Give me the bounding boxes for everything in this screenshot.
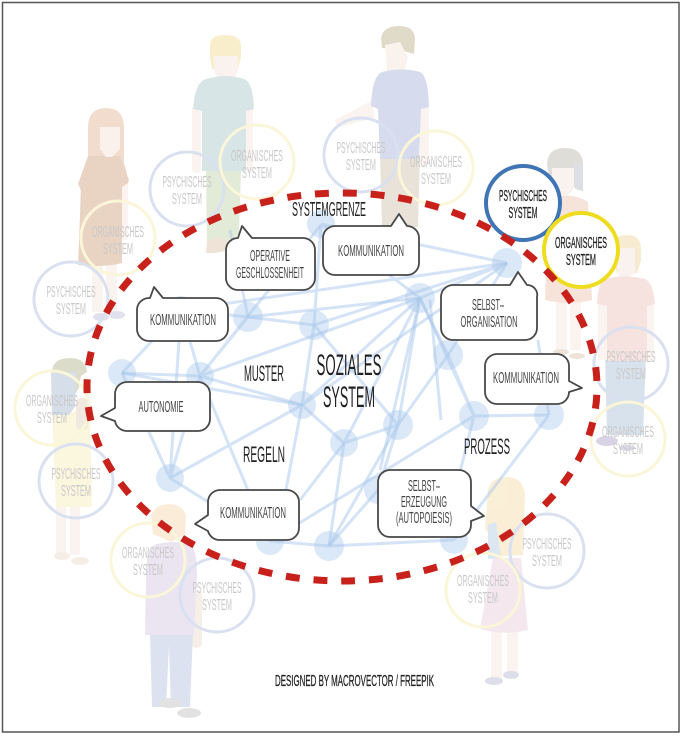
faint circle: psychisches system, pink girl: SYSTEM	[532, 553, 562, 570]
highlighted circle: organisches system	[544, 213, 618, 287]
callout: selbsterzeugung autopoiesis: (AUTOPOIESIS)	[396, 510, 452, 527]
faint circle: organisches system, teal man: SYSTEM	[242, 165, 272, 182]
faint circle: organisches system, pink girl: ORGANISCHES	[457, 573, 509, 590]
faint circle: organisches system, teal man: ORGANISCHES	[231, 148, 283, 165]
faint circle: psychisches system, blue man: SYSTEM	[346, 157, 376, 174]
faint circle: psychisches system, left woman: PSYCHISCHES	[52, 466, 100, 483]
person: man with blue shirt	[335, 26, 429, 227]
highlighted circle: organisches system: SYSTEM	[566, 252, 596, 269]
callout: kommunikation top: KOMMUNIKATION	[338, 243, 404, 260]
faint circle: psychisches system, purple person	[180, 558, 254, 632]
callout: kommunikation left	[137, 287, 228, 341]
highlighted circle: psychisches system: SYSTEM	[508, 205, 538, 222]
faint circle: organisches system, left woman: ORGANISCHES	[26, 393, 78, 410]
highlighted circle: organisches system: ORGANISCHES	[555, 235, 607, 252]
highlighted circle: psychisches system: PSYCHISCHES	[499, 188, 547, 205]
faint circle: organisches system, purple person: ORGANISCHES	[122, 545, 174, 562]
faint circle: organisches system, pink girl	[446, 553, 520, 627]
faint circle: psychisches system, red man: SYSTEM	[616, 366, 646, 383]
callout: kommunikation bottom	[195, 490, 299, 540]
callout: operative geschlossenheit: OPERATIVE	[250, 248, 290, 265]
faint circle: psychisches system, blue man	[324, 118, 398, 192]
faint circle: psychisches system, pink girl	[510, 514, 584, 588]
callout: selbst-organisation: SELBST–	[472, 297, 504, 314]
faint circle: psychisches system, teal man	[150, 152, 224, 226]
person: person with purple shirt	[145, 504, 202, 718]
faint circle: psychisches system, girl: SYSTEM	[56, 301, 86, 318]
faint circle: organisches system, left woman: SYSTEM	[37, 410, 67, 427]
faint circle: organisches system, red man	[591, 402, 665, 476]
callout: kommunikation right	[485, 354, 582, 404]
faint circle: organisches system, girl	[81, 201, 155, 275]
faint circle: organisches system, girl: SYSTEM	[103, 241, 133, 258]
faint circle: psychisches system, left woman: SYSTEM	[61, 483, 91, 500]
callout: autonomie: AUTONOMIE	[138, 399, 184, 416]
callout: kommunikation left: KOMMUNIKATION	[150, 312, 216, 329]
faint circle: psychisches system, purple person: SYSTEM	[202, 597, 232, 614]
person: woman with blue top and yellow skirt	[51, 358, 92, 565]
faint circle: psychisches system, teal man: PSYCHISCHES	[162, 174, 212, 191]
callout: kommunikation bottom: KOMMUNIKATION	[220, 505, 286, 522]
faint circle: psychisches system, red man	[594, 327, 668, 401]
callout: kommunikation right: KOMMUNIKATION	[493, 370, 559, 387]
text: DESIGNED BY MACROVECTOR / FREEPIK	[275, 673, 434, 690]
faint circle: organisches system, purple person	[111, 523, 185, 597]
text: MUSTER	[244, 361, 284, 386]
callout: selbsterzeugung autopoiesis: ERZEUGUNG	[401, 494, 447, 511]
faint circle: psychisches system, left woman	[39, 444, 113, 518]
faint circle: organisches system, girl: ORGANISCHES	[92, 224, 144, 241]
faint circle: psychisches system, girl: PSYCHISCHES	[46, 284, 96, 301]
faint circle: psychisches system, blue man: PSYCHISCHES	[336, 140, 386, 157]
callout: selbst-organisation: ORGANISATION	[460, 314, 518, 331]
person: man with red shirt	[596, 235, 655, 451]
faint circle: psychisches system, pink girl: PSYCHISCHES	[522, 536, 572, 553]
highlighted circle: psychisches system	[486, 166, 560, 240]
callout: kommunikation top	[323, 214, 419, 275]
text: SOZIALES	[316, 349, 382, 382]
faint circle: organisches system, red man: SYSTEM	[613, 441, 643, 458]
person: woman with grey hair	[545, 148, 592, 359]
person: girl with brown dress	[78, 108, 129, 321]
network of nodes and connections	[108, 210, 564, 561]
callout: selbst-organisation	[441, 272, 537, 340]
faint circle: organisches system, pink girl: SYSTEM	[468, 590, 498, 607]
text: PROZESS	[464, 434, 510, 459]
text: SYSTEM	[323, 381, 375, 414]
faint circle: organisches system, purple person: SYSTEM	[133, 562, 163, 579]
faint circle: organisches system, blue man: ORGANISCHES	[410, 154, 462, 171]
faint circle: organisches system, left woman	[15, 371, 89, 445]
title: soziales system	[316, 349, 382, 414]
system boundary: red dashed ellipse	[87, 193, 597, 581]
person: man with teal shirt	[192, 35, 254, 253]
faint circle: organisches system, blue man: SYSTEM	[421, 171, 451, 188]
person: girl with pink dress	[480, 477, 528, 685]
faint circle: psychisches system, teal man: SYSTEM	[172, 191, 202, 208]
faint circle: organisches system, teal man	[220, 125, 294, 199]
text: SYSTEMGRENZE	[292, 199, 366, 221]
text: REGELN	[243, 442, 285, 467]
callout: autonomie	[101, 382, 210, 431]
callout: operative geschlossenheit: GESCHLOSSENHEIT	[236, 265, 304, 282]
faint circle: psychisches system, purple person: PSYCHISCHES	[192, 580, 242, 597]
callout: selbsterzeugung autopoiesis	[378, 470, 484, 537]
callout: selbsterzeugung autopoiesis: SELBST–	[408, 478, 440, 495]
faint circle: psychisches system, girl	[34, 262, 108, 336]
faint circle: organisches system, blue man	[399, 131, 473, 205]
callout: operative geschlossenheit	[226, 226, 315, 290]
